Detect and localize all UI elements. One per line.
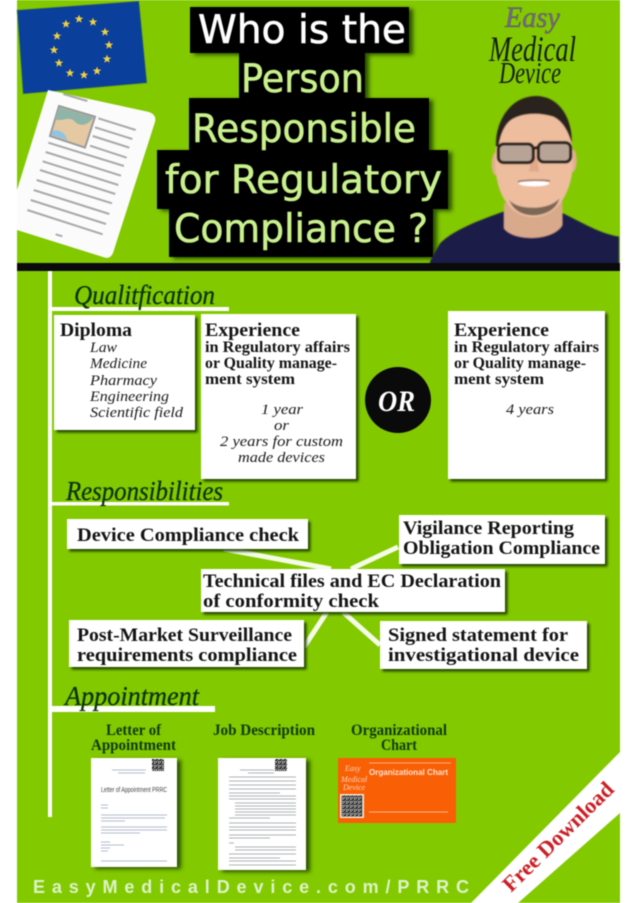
panel: diploma: Law (89, 340, 117, 356)
panel: experience 1 year: or (274, 418, 289, 434)
title: Who is the (198, 8, 406, 53)
title: Responsible (192, 107, 416, 152)
document: letter of appointment (91, 758, 177, 867)
title: Compliance ? (174, 207, 428, 252)
panel: experience 4 years: ment system (454, 371, 544, 388)
panel: diploma (54, 315, 195, 430)
panel: experience 4 years: in Regulatory affairs (454, 339, 599, 356)
timeline vertical line (48, 271, 52, 817)
black divider bar (17, 263, 620, 271)
panel: experience 1 year (201, 314, 356, 479)
panel: experience 1 year: made devices (238, 450, 325, 466)
title (157, 7, 448, 257)
free download ribbon (471, 752, 620, 903)
box: technical files: Technical files and EC Declaration (203, 571, 501, 592)
label: letter of appointment: Letter of (106, 722, 162, 739)
box: technical files (201, 569, 505, 612)
panel: diploma: Diploma (60, 320, 133, 341)
logo: Easy Medical Device: Device (498, 55, 561, 90)
panel: experience 1 year: 1 year (261, 402, 303, 418)
label: organizational chart: Chart (381, 737, 418, 754)
logo: Easy Medical Device: Easy (504, 1, 561, 34)
box: device compliance check: Device Compliance check (77, 525, 299, 546)
title: for Regulatory (165, 158, 442, 203)
title: Person (241, 57, 364, 102)
panel: experience 1 year: ment system (205, 371, 295, 388)
label: letter of appointment (91, 722, 177, 754)
free download ribbon: Free Download (497, 776, 619, 897)
box: post-market surveillance (69, 620, 304, 667)
box: post-market surveillance: Post-Market Surveillance (77, 625, 292, 646)
box: signed statement: Signed statement for (388, 625, 569, 646)
document: organizational chart card: Device (342, 783, 366, 792)
document: organizational chart card: Easy (344, 764, 361, 773)
heading: Qualification: Qualitfication (74, 280, 215, 310)
panel: experience 4 years (448, 311, 605, 479)
panel: diploma: Scientific field (90, 405, 184, 421)
box: signed statement (380, 621, 587, 669)
panel: experience 4 years: Experience (454, 320, 549, 341)
heading: Responsibilities: Responsibilities (65, 476, 223, 506)
box: signed statement: investigational device (388, 645, 579, 666)
heading: Appointment: Appointment (63, 681, 200, 711)
box: device compliance check (67, 519, 308, 549)
panel: diploma: Engineering (89, 389, 170, 405)
box: vigilance reporting: Vigilance Reporting (403, 518, 575, 539)
person portrait (430, 96, 619, 265)
label: organizational chart: Organizational (351, 722, 448, 739)
panel: experience 4 years: 4 years (506, 402, 554, 418)
panel: experience 1 year: Experience (205, 320, 300, 341)
EU flag (17, 1, 147, 94)
OR circle: OR (378, 385, 415, 418)
panel: diploma: Medicine (89, 356, 147, 372)
box: vigilance reporting: Obligation Compliance (403, 538, 600, 559)
label: job description: Job Description (213, 722, 315, 739)
document: job description (218, 758, 306, 870)
label: letter of appointment: Appointment (91, 737, 177, 754)
logo: Easy Medical Device: Medical (488, 29, 576, 69)
footer url: EasyMedicalDevice.com/PRRC (33, 877, 469, 897)
document: organizational chart card (338, 758, 456, 823)
connector lines (224, 547, 398, 647)
panel: experience 4 years: or Quality manage- (454, 355, 586, 372)
document: organizational chart card: Organizational Chart (369, 767, 448, 777)
box: vigilance reporting (399, 515, 605, 564)
panel: experience 1 year: in Regulatory affairs (205, 339, 350, 356)
panel: diploma: Pharmacy (89, 373, 157, 389)
logo: Easy Medical Device (488, 1, 576, 90)
document: organizational chart card: Medical (340, 775, 368, 784)
panel: experience 1 year: 2 years for custom (220, 434, 343, 450)
panel: experience 1 year: or Quality manage- (205, 355, 337, 372)
document: letter of appointment: Letter of Appointment PRRC (101, 785, 167, 794)
icon: document (17, 90, 155, 258)
label: organizational chart (351, 722, 448, 754)
OR circle (365, 367, 431, 433)
box: post-market surveillance: requirements compliance (77, 645, 297, 666)
box: technical files: of conformity check (203, 591, 379, 612)
